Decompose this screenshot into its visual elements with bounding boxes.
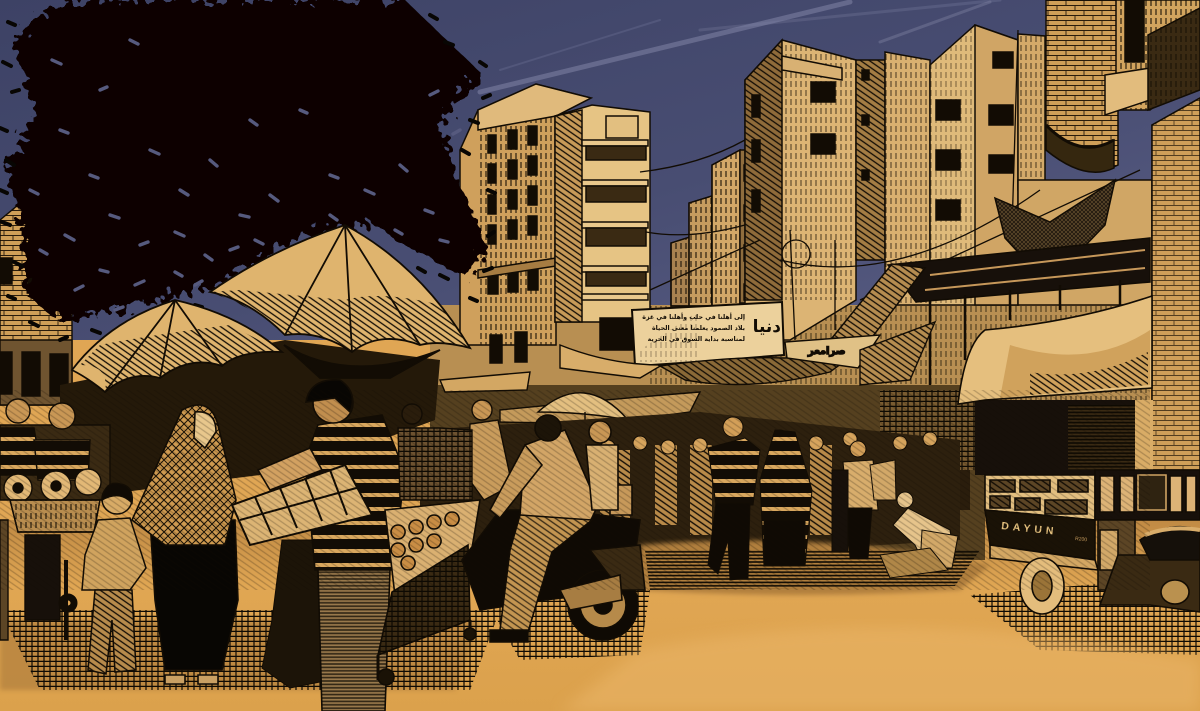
loose black leaves around the canopy edge [0,15,495,340]
three wheeled truck: R200 [1075,536,1088,543]
figure: man carrying crate [258,380,404,711]
left crowd and bread vendors [0,399,110,640]
three wheeled truck: DAYUN [1001,520,1058,538]
figure: striped shirt walker [708,417,760,580]
fruit cart [378,500,480,685]
motorbike [462,485,645,640]
arabic banner: إلى أهلنا في حلب وأهلنا في غزة [642,312,745,321]
backdrop of lower street facades [430,305,1150,400]
street shadow hatching [0,540,1200,690]
crowd mass [420,412,960,560]
figure: woman in headscarf [132,405,238,684]
round tower and right wall [1046,0,1200,470]
building: large apartment block [745,25,1152,340]
hanging net [995,180,1115,272]
right shop interior [880,390,1153,510]
figure: woman in striped cloak [760,430,812,566]
large market umbrella [210,225,470,378]
cream awning [958,296,1152,404]
figure: child [82,483,146,674]
arabic banner [632,302,784,366]
sky [0,0,1200,340]
figure: vendor behind cart [398,400,512,500]
three wheeled truck [985,470,1200,614]
middle distance shopfronts [430,385,985,560]
figure: motorbike rider [490,415,618,642]
building: far-left stone house [0,195,72,405]
far foreground light on road [560,627,1200,711]
corrugated shop roof [832,238,1150,385]
tree canopy [0,0,495,340]
tree leaf flecks [30,40,460,310]
small mid-street umbrella [538,393,628,450]
dark stall interior beneath umbrellas [60,340,440,500]
arabic banner: دنيا [753,317,781,337]
carried plastic crate [232,465,372,545]
road [0,520,1200,711]
distant buildings [671,150,768,306]
sagging cloth awnings below the banner [440,322,935,423]
figure: legs behind the crate [262,540,335,688]
overhead wires [640,30,1140,340]
arabic banner: بلاد الصمود يعلمنا معنى الحياة [652,325,745,332]
sagging cloth awnings below the banner: صرامعر [807,346,845,357]
building: left tall block [460,84,591,363]
figure: crouching man [880,492,958,578]
arabic banner: لمناسبة بداية السوق في الحرية [648,336,745,343]
pen hatching over the crowd zone [0,390,1150,590]
contrails in the sky [480,0,1000,92]
left market umbrella [72,300,282,392]
figure: men near the stall [832,441,896,558]
building: balcony tower [555,105,650,350]
